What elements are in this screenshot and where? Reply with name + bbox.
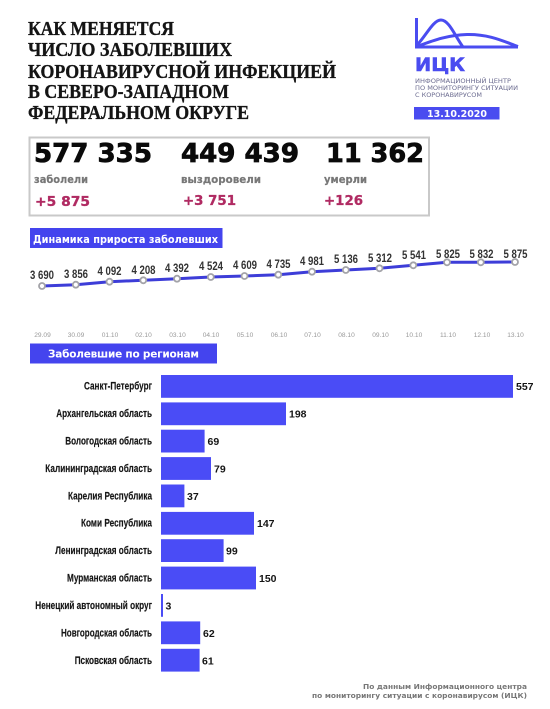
logo: ИЦК: ИНФОРМАЦИОННЫЙ ЦЕНТР	[415, 76, 511, 85]
chart value labels	[30, 249, 528, 282]
chart value labels: 4 092	[98, 266, 122, 278]
chart date axis: 12.10	[474, 332, 491, 339]
chart date axis: 11.10	[440, 332, 456, 339]
bar: Псковская область	[75, 649, 214, 672]
bar: Калининградская область: Калининградская область	[45, 463, 152, 475]
logo: ИЦК: ИЦК	[415, 54, 465, 76]
chart value labels: 3 690	[30, 270, 54, 282]
chart date axis: 06.10	[271, 332, 288, 339]
bar: Санкт-Петербург: Санкт-Петербург	[84, 380, 152, 392]
bar: Мурманская область: 150	[259, 573, 277, 585]
bar: Коми Республика: Коми Республика	[81, 518, 153, 530]
stat: deaths: умерли	[324, 174, 367, 186]
bar chart: regions	[35, 375, 534, 672]
bar: Новгородская область	[61, 621, 215, 644]
bar: Псковская область: 61	[202, 656, 214, 668]
icon: epidemic curves	[416, 18, 518, 47]
logo: ИЦК	[414, 18, 518, 120]
chart date axis: 05.10	[237, 332, 254, 339]
chart value labels: 5 825	[436, 249, 461, 261]
stat: recovered: выздоровели	[181, 174, 261, 186]
bar: Ленинградская область: 99	[226, 546, 238, 558]
bar: Ленинградская область: Ленинградская область	[55, 545, 152, 557]
chart date axis	[34, 332, 524, 339]
bar: Мурманская область	[67, 567, 277, 589]
chart value labels: 4 208	[132, 265, 156, 277]
line chart	[30, 249, 528, 339]
chart value labels: 4 735	[266, 259, 291, 271]
logo: ИЦК: ПО МОНИТОРИНГУ СИТУАЦИИ	[415, 84, 518, 92]
bar: Санкт-Петербург: 557	[516, 381, 534, 393]
bar: Новгородская область: 62	[203, 628, 215, 640]
chart date axis: 13.10	[507, 332, 524, 339]
stat: infected: +5 875	[35, 195, 90, 210]
chart date axis: 03.10	[169, 332, 186, 339]
bar: Санкт-Петербург	[84, 375, 534, 398]
bar: Архангельская область: 198	[289, 408, 307, 420]
chart date axis: 02.10	[135, 332, 152, 339]
bar: Архангельская область: Архангельская область	[56, 408, 152, 420]
bar: Мурманская область: Мурманская область	[67, 572, 152, 584]
title: В СЕВЕРО-ЗАПАДНОМ	[28, 81, 229, 103]
bar: Коми Республика: 147	[257, 518, 275, 530]
heading: dynamics	[30, 228, 222, 248]
stat: infected: 577 335	[34, 139, 152, 169]
bar: Псковская область: Псковская область	[75, 655, 152, 667]
stat: recovered	[181, 139, 299, 209]
bar: Вологодская область: Вологодская область	[65, 436, 152, 448]
title: ФЕДЕРАЛЬНОМ ОКРУГЕ	[28, 102, 249, 124]
bar: Ненецкий автономный округ: 3	[166, 600, 172, 612]
heading: dynamics: Динамика прироста заболевших	[33, 233, 218, 246]
bar: Карелия Республика: 37	[187, 491, 199, 503]
logo: ИЦК: С КОРОНАВИРУСОМ	[415, 91, 482, 99]
chart value labels: 4 609	[233, 260, 257, 272]
title: ЧИСЛО ЗАБОЛЕВШИХ	[28, 39, 232, 61]
source note: по мониторингу ситуации с коронавирусом (ИЦК)	[312, 692, 527, 700]
bar: Ленинградская область	[55, 539, 238, 562]
bar: Архангельская область	[56, 402, 307, 425]
stat: recovered: +3 751	[183, 194, 236, 209]
chart value labels: 4 524	[199, 261, 224, 273]
title	[28, 18, 336, 124]
bar: Коми Республика	[81, 512, 275, 535]
bar: Карелия Республика: Карелия Республика	[68, 490, 153, 502]
bar: Ненецкий автономный округ: Ненецкий автономный округ	[35, 600, 152, 612]
source note	[312, 683, 527, 700]
stat: infected	[34, 139, 152, 210]
bar: Калининградская область	[45, 457, 226, 480]
chart value labels: 4 392	[165, 263, 189, 275]
chart date axis: 08.10	[338, 332, 355, 339]
source note: По данным Информационного центра	[363, 683, 527, 691]
stat: deaths: +126	[324, 194, 363, 209]
heading: regions	[30, 344, 217, 364]
chart value labels: 5 541	[402, 250, 427, 262]
chart date axis: 30.09	[68, 332, 85, 339]
chart date axis: 01.10	[102, 332, 119, 339]
panel: totals	[30, 138, 429, 216]
stat: infected: заболели	[34, 174, 88, 186]
bar: Новгородская область: Новгородская область	[61, 628, 152, 640]
bar: Карелия Республика	[68, 484, 199, 507]
chart value labels: 5 312	[368, 253, 392, 265]
title: КАК МЕНЯЕТСЯ	[28, 18, 174, 40]
chart value labels: 5 875	[504, 249, 528, 261]
chart value labels: 3 856	[64, 269, 88, 281]
stat: recovered: 449 439	[181, 139, 299, 169]
chart date axis: 10.10	[406, 332, 423, 339]
chart date axis: 09.10	[372, 332, 389, 339]
chart date axis: 07.10	[304, 332, 321, 339]
chart date axis: 29.09	[34, 332, 51, 339]
stat: deaths: 11 362	[326, 139, 424, 169]
heading: regions: Заболевшие по регионам	[48, 348, 199, 360]
bar: Вологодская область: 69	[208, 436, 219, 448]
stat: deaths	[324, 139, 424, 209]
chart date axis: 04.10	[203, 332, 220, 339]
bar: Ненецкий автономный округ	[35, 594, 172, 617]
date badge: 13.10.2020	[427, 109, 487, 120]
chart value labels: 4 981	[300, 256, 325, 268]
chart value labels: 5 136	[334, 254, 358, 266]
bar: Калининградская область: 79	[214, 464, 226, 476]
bar: Вологодская область	[65, 430, 219, 452]
title: КОРОНАВИРУСНОЙ ИНФЕКЦИЕЙ	[28, 60, 336, 83]
chart value labels: 5 832	[470, 249, 494, 261]
